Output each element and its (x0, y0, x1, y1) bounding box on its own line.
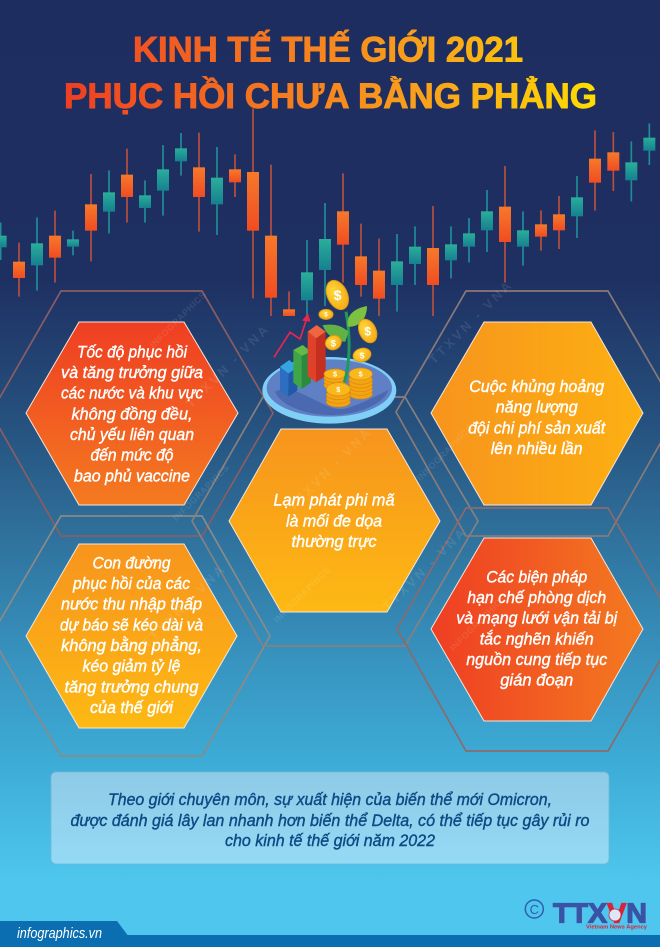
watermarks: TTXVN - VNA (139, 562, 227, 651)
hexagon: inflation (229, 429, 440, 612)
hexagon outlines (0, 291, 660, 756)
hexagon: uneven recovery: các nước và khu vực (61, 384, 203, 403)
hexagon: inflation: thường trực (292, 532, 377, 551)
watermarks: INFOGRAPHICS (415, 423, 475, 483)
dollar signs: $ (364, 325, 371, 339)
plant stem and leaves (323, 306, 367, 383)
hexagon: energy crisis: lên nhiều lần (491, 439, 583, 458)
watermarks: INFOGRAPHICS (171, 463, 231, 523)
coin stacks (324, 368, 372, 399)
hexagon: energy crisis: Cuộc khủng hoảng (469, 377, 605, 396)
hexagon: supply disruption: Các biện pháp (486, 567, 587, 586)
watermarks: TTXVN - VNA (285, 425, 373, 514)
floating coins (319, 277, 380, 364)
hexagon: supply disruption: hạn chế phòng dịch (467, 588, 606, 607)
hexagon: uneven recovery: Tốc độ phục hồi (77, 342, 188, 361)
watermarks: TTXVN - VNA (380, 525, 468, 614)
hexagon: uneven recovery: chủ yếu liên quan (70, 425, 194, 444)
hexagon: supply disruption: và mạng lưới vận tải bị (456, 609, 618, 628)
dollar signs: $ (336, 385, 340, 394)
footer band (0, 921, 660, 947)
hexagon: uneven recovery: không đồng đều, (72, 404, 192, 423)
watermarks: INFOGRAPHICS (448, 593, 508, 653)
watermarks: INFOGRAPHICS (272, 565, 332, 625)
hexagon: uneven recovery (26, 322, 238, 505)
callout: Omicron note: Theo giới chuyên môn, sự xuất hiện của biến thể mới Omicron, (108, 790, 552, 809)
dollar signs: $ (359, 370, 363, 379)
hexagon: low-income countries: của thế giới (90, 698, 174, 717)
dollar signs: $ (324, 313, 328, 319)
hexagon: uneven recovery: và tăng trưởng giữa (61, 363, 203, 382)
trend arrow (274, 315, 309, 357)
title (64, 30, 597, 116)
hexagon: inflation: là mối đe dọa (286, 511, 382, 530)
hexagon: low-income countries: kéo giảm tỷ lệ (82, 657, 180, 676)
hexagon: low-income countries: nước thu nhập thấp (61, 595, 202, 614)
hexagon: energy crisis (431, 322, 643, 505)
dollar signs: $ (331, 338, 337, 348)
source label: infographics.vn (17, 925, 102, 942)
hexagon: low-income countries: dự báo sẽ kéo dài và (60, 615, 203, 634)
dollar signs: $ (333, 370, 337, 379)
watermarks: TTXVN - VNA (183, 322, 271, 411)
watermarks: INFOGRAPHICS (148, 290, 208, 350)
green bar (293, 345, 311, 389)
hexagon: energy crisis: năng lượng (496, 398, 578, 417)
red bar (308, 325, 326, 382)
hexagon: supply disruption: gián đoạn (500, 671, 573, 690)
hexagon: energy crisis: đội chi phí sản xuất (468, 418, 606, 437)
hexagon: uneven recovery: đến mức độ (90, 446, 174, 465)
title: KINH TẾ THẾ GIỚI 2021 (133, 30, 523, 70)
hexagon: supply disruption: tắc nghẽn khiến (480, 629, 594, 648)
callout: Omicron note: được đánh giá lây lan nhanh hơn biến thể Delta, có thể tiếp tục gây rủi ro (70, 811, 590, 830)
hexagon: inflation: Lạm phát phi mã (274, 491, 395, 510)
logo: TTXVN: Vietnam News Agency (586, 924, 648, 930)
hexagon: low-income countries: phục hồi của các (72, 574, 190, 593)
icon: growth dish with bars, plant and coins (262, 277, 396, 424)
dollar signs: $ (360, 350, 365, 360)
blue bar (280, 360, 297, 397)
hexagon: low-income countries: tăng trưởng chung (64, 677, 199, 696)
dish (262, 357, 396, 424)
watermarks (139, 278, 514, 653)
hexagon: supply disruption (431, 538, 643, 721)
logo: TTXVN: C (530, 902, 539, 917)
candlestick chart (0, 108, 655, 317)
hexagon: supply disruption: nguồn cung tiếp tục (466, 650, 608, 669)
logo: TTXVN: TTXVN (553, 898, 647, 928)
front coin stack (326, 383, 350, 407)
dollar signs (324, 287, 371, 394)
dollar signs: $ (334, 287, 342, 303)
callout: Omicron note: cho kinh tế thế giới năm 2022 (225, 831, 436, 850)
hexagon: low-income countries (26, 544, 237, 728)
hexagon: low-income countries: không bằng phẳng, (61, 636, 202, 655)
hexagon: low-income countries: Con đường (92, 553, 171, 572)
watermarks: TTXVN - VNA (426, 278, 514, 367)
title: PHỤC HỒI CHƯA BẰNG PHẲNG (64, 76, 597, 116)
hexagon: uneven recovery: bao phủ vaccine (74, 466, 190, 485)
callout: Omicron note (51, 772, 609, 864)
